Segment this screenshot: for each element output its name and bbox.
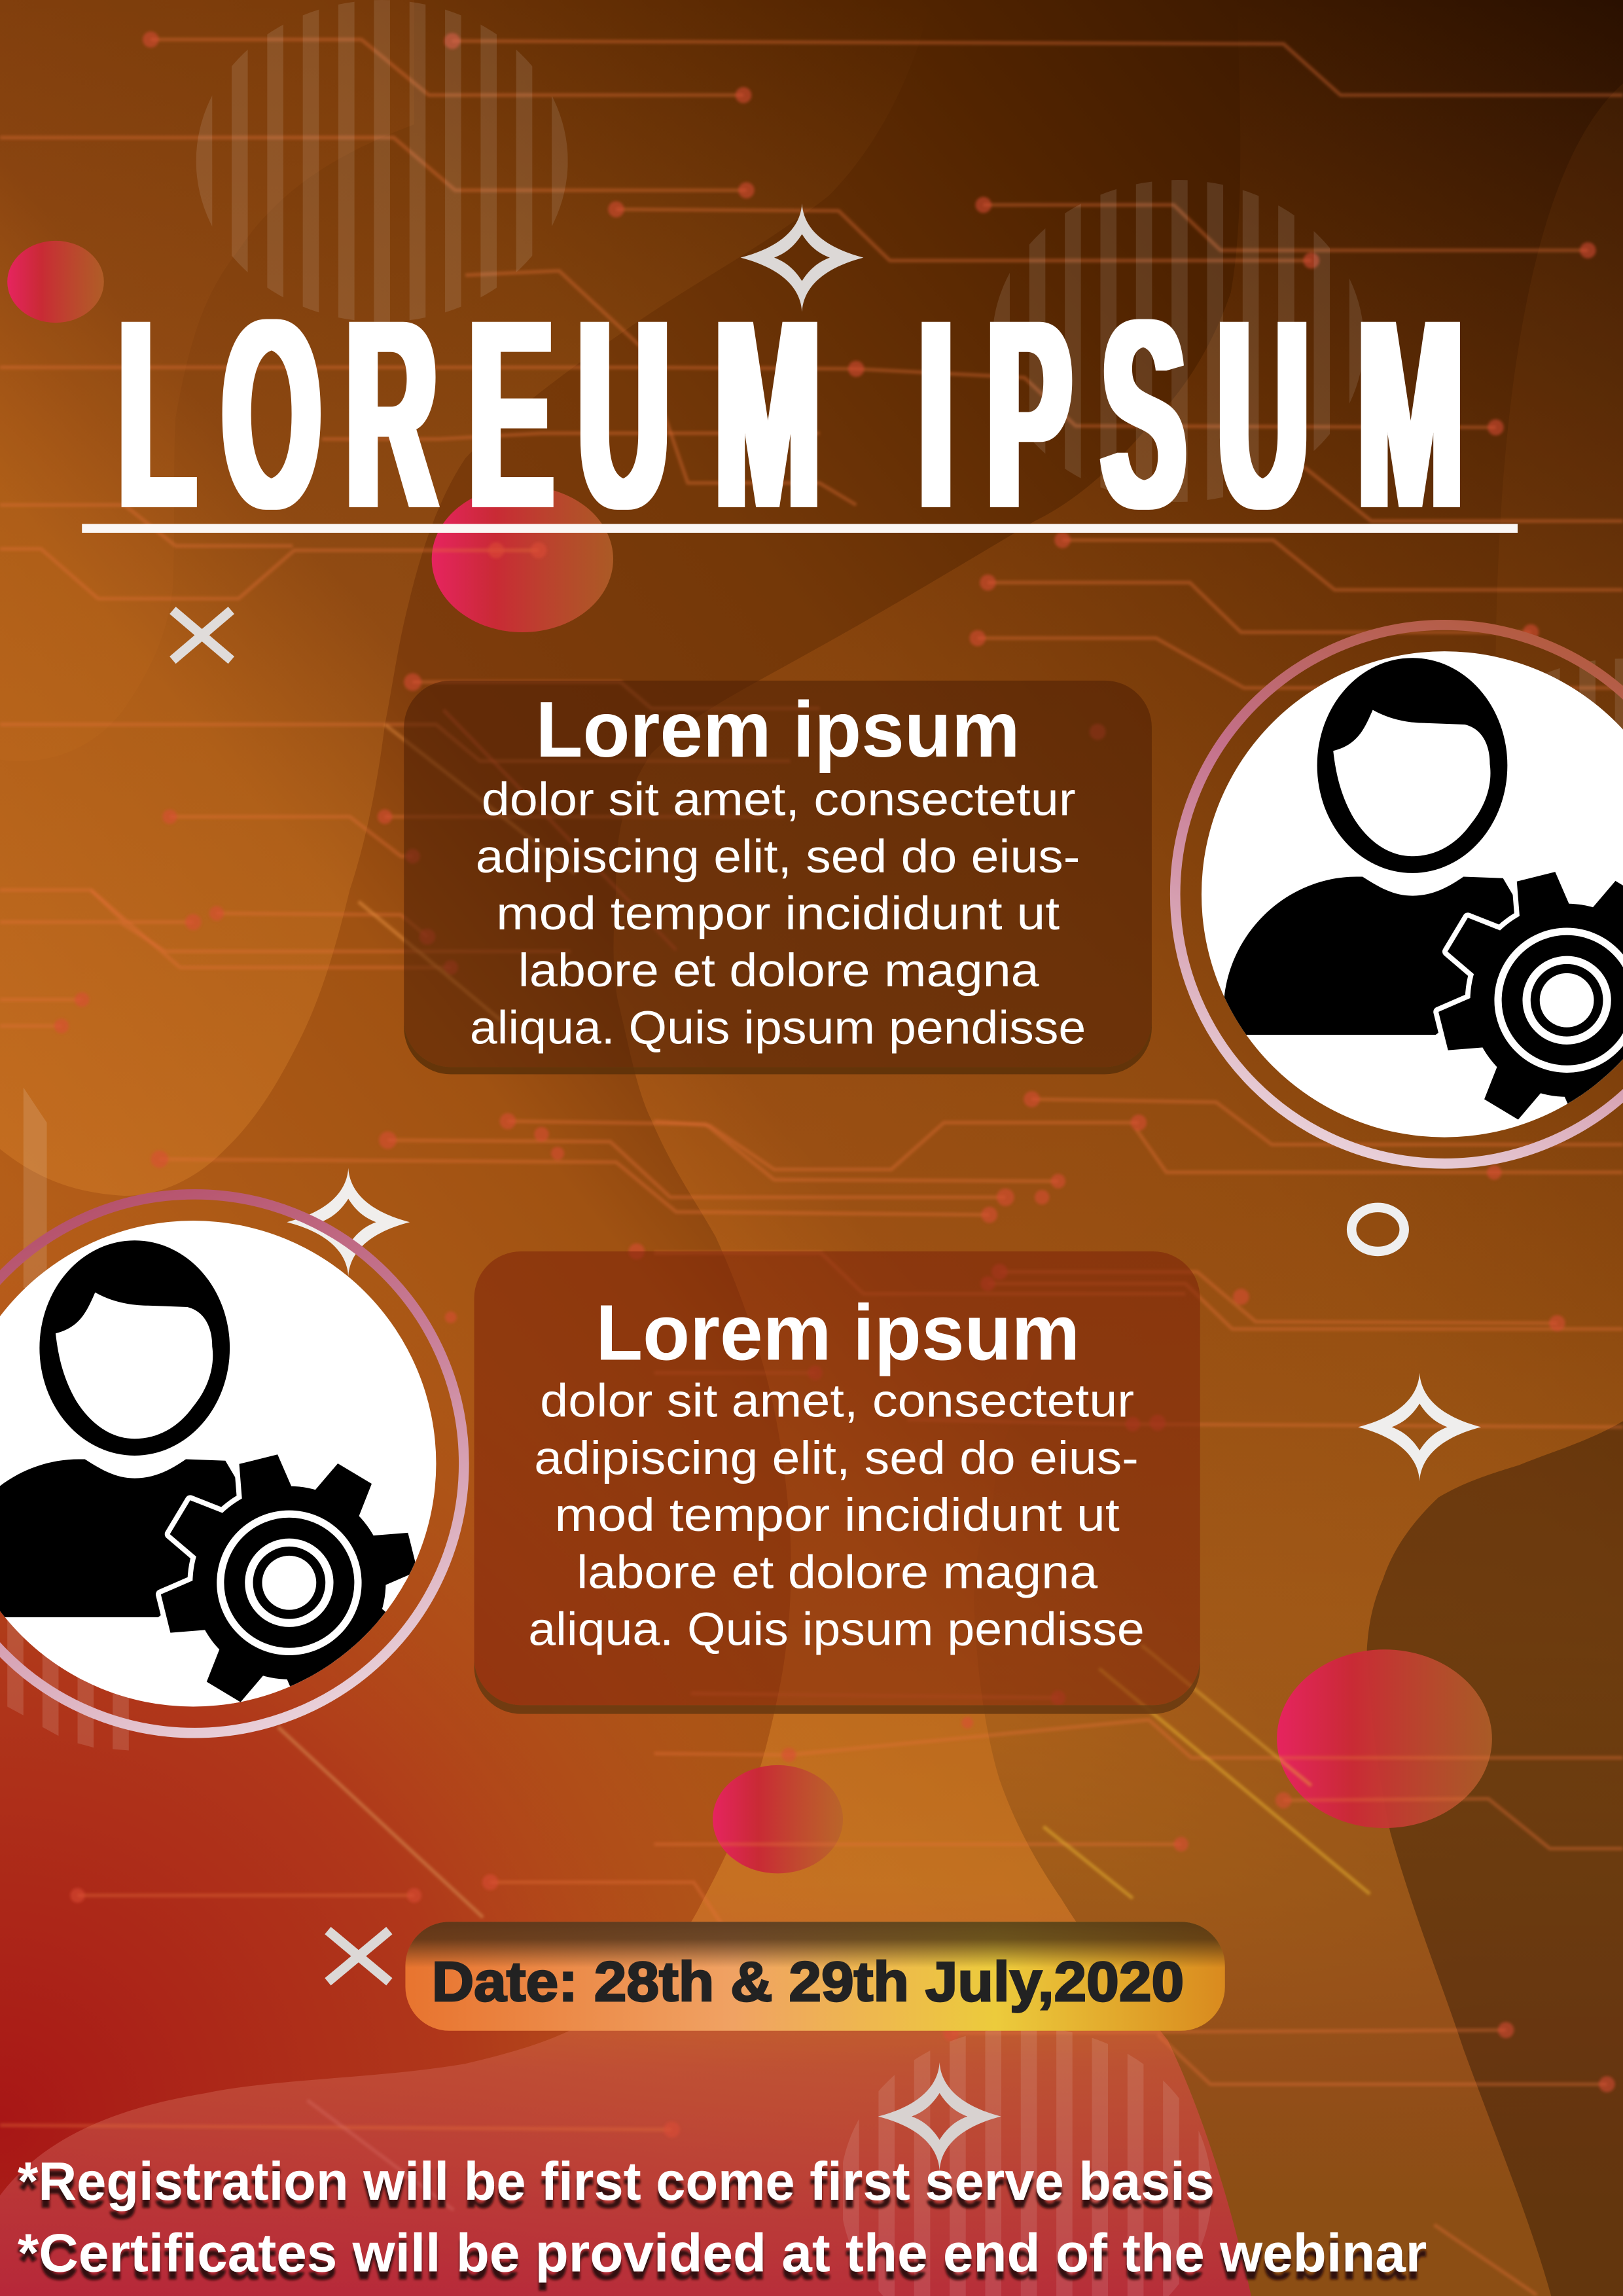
panel body text: labore et dolore magna [577, 1546, 1097, 1598]
sparkle: top [741, 204, 863, 312]
panel body text: adipiscing elit, sed do eius- [476, 831, 1080, 883]
panel body text: aliqua. Quis ipsum pendisse [470, 1001, 1086, 1054]
panel body text: mod tempor incididunt ut [555, 1489, 1120, 1541]
panel body text [528, 1375, 1145, 1656]
striped circle: behind left portrait [7, 1088, 129, 1751]
pink blob: centre [713, 1765, 843, 1873]
icon: engineer with gear [1224, 658, 1623, 1155]
portrait: left [0, 1194, 464, 1737]
panel body text: aliqua. Quis ipsum pendisse [528, 1604, 1145, 1656]
panel body text: dolor sit amet, consectetur [540, 1375, 1134, 1427]
portrait: right [1175, 625, 1623, 1164]
panel body text: dolor sit amet, consectetur [482, 774, 1076, 826]
sparkle: right [1358, 1373, 1481, 1481]
panel heading: Lorem ipsum [596, 1288, 1080, 1376]
cross mark: top left [173, 611, 231, 660]
icon: engineer with gear [0, 1240, 419, 1703]
small ring [1351, 1208, 1404, 1251]
pink blob: under title [432, 486, 613, 632]
sparkle: bottom [878, 2062, 1001, 2170]
pink blob: top left [7, 241, 104, 323]
cross mark: beside date [328, 1931, 389, 1982]
panel body text: adipiscing elit, sed do eius- [534, 1432, 1139, 1484]
date pill [405, 1922, 1225, 2031]
footer notes: *Certificates will be provided at the end of the webinar [18, 2223, 1427, 2284]
panel: lower text [474, 1251, 1200, 1714]
date text: Date: 28th & 29th July,2020 [432, 1951, 1184, 2013]
footer notes: *Registration will be first come first serve basis [18, 2151, 1215, 2212]
striped circle: top left [196, 0, 568, 336]
striped circle: top right [993, 166, 1365, 516]
title: LOREUM IPSUM [118, 264, 1463, 565]
striped circle: bottom [843, 2013, 1215, 2296]
panel: top text [404, 681, 1152, 1074]
panel body text: labore et dolore magna [518, 944, 1039, 997]
footer notes [18, 2151, 1427, 2284]
sparkle: left [287, 1168, 410, 1276]
panel heading: Lorem ipsum [535, 685, 1020, 774]
panel body text: mod tempor incididunt ut [496, 888, 1060, 940]
panel body text [470, 774, 1086, 1054]
striped circle: behind right portrait [1546, 658, 1623, 729]
title underline [82, 524, 1518, 533]
pink blob: right [1277, 1649, 1492, 1828]
